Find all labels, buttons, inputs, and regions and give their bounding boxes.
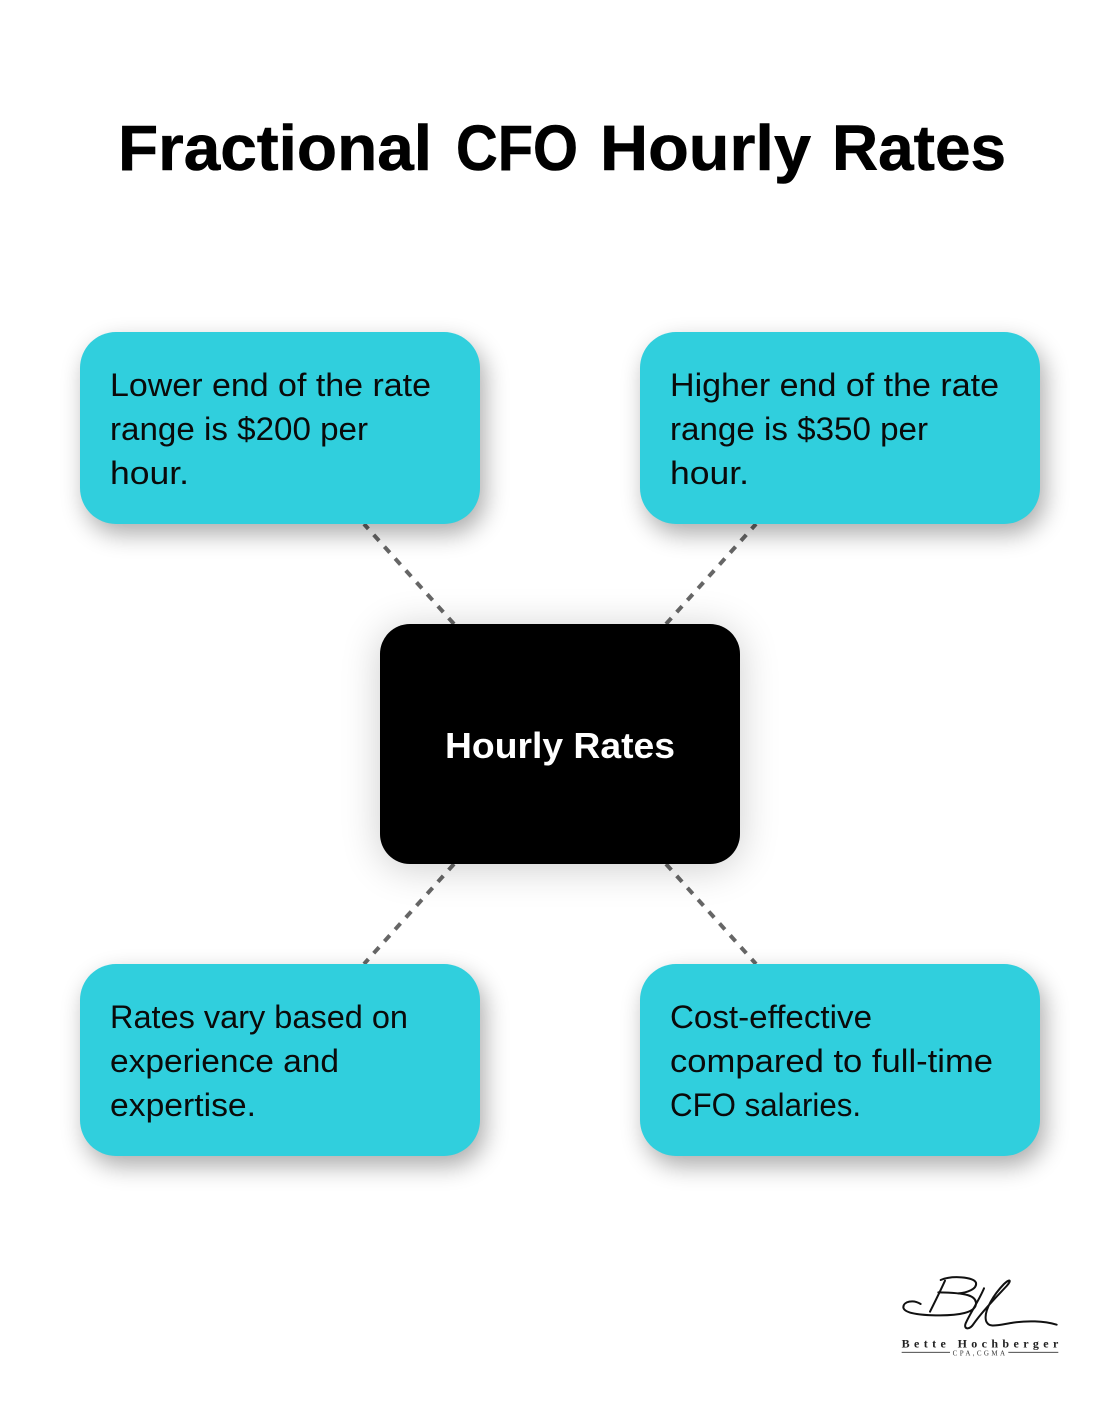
panel: rates vary: expertise.: [110, 1087, 256, 1123]
panel: cost-effective: Cost-effective: [670, 999, 872, 1035]
logo: Bette Hochberger: CPA,CGMA: [953, 1350, 1005, 1358]
title: Hourly: [600, 112, 811, 184]
panel: higher end of the rate: hour.: [670, 455, 749, 491]
title: Rates: [832, 112, 1006, 184]
panel: rates vary: experience and: [110, 1043, 339, 1079]
panel: rates vary: [80, 964, 480, 1156]
logo: Bette Hochberger: Bette Hochberger: [902, 1336, 1059, 1350]
panel: higher end of the rate: range is $350 per: [670, 411, 928, 447]
panel: cost-effective: compared to full-time: [670, 1043, 993, 1079]
panel: rates vary: Rates vary based on: [110, 999, 408, 1035]
panel: hourly rates centre: Hourly Rates: [445, 725, 675, 766]
title: Fractional: [118, 112, 432, 184]
panel: lower end of the rate: Lower end of the rate: [110, 367, 431, 403]
panel: cost-effective: [640, 964, 1040, 1156]
panel: lower end of the rate: range is $200 per: [110, 411, 368, 447]
panel: lower end of the rate: hour.: [110, 455, 189, 491]
title: CFO: [456, 112, 578, 184]
panel: higher end of the rate: Higher end of the rate: [670, 367, 999, 403]
panel: cost-effective: CFO salaries.: [670, 1087, 861, 1123]
panel: hourly rates centre: [380, 624, 740, 864]
panel: higher end of the rate: [640, 332, 1040, 524]
title: [118, 112, 1006, 184]
panel: lower end of the rate: [80, 332, 480, 524]
